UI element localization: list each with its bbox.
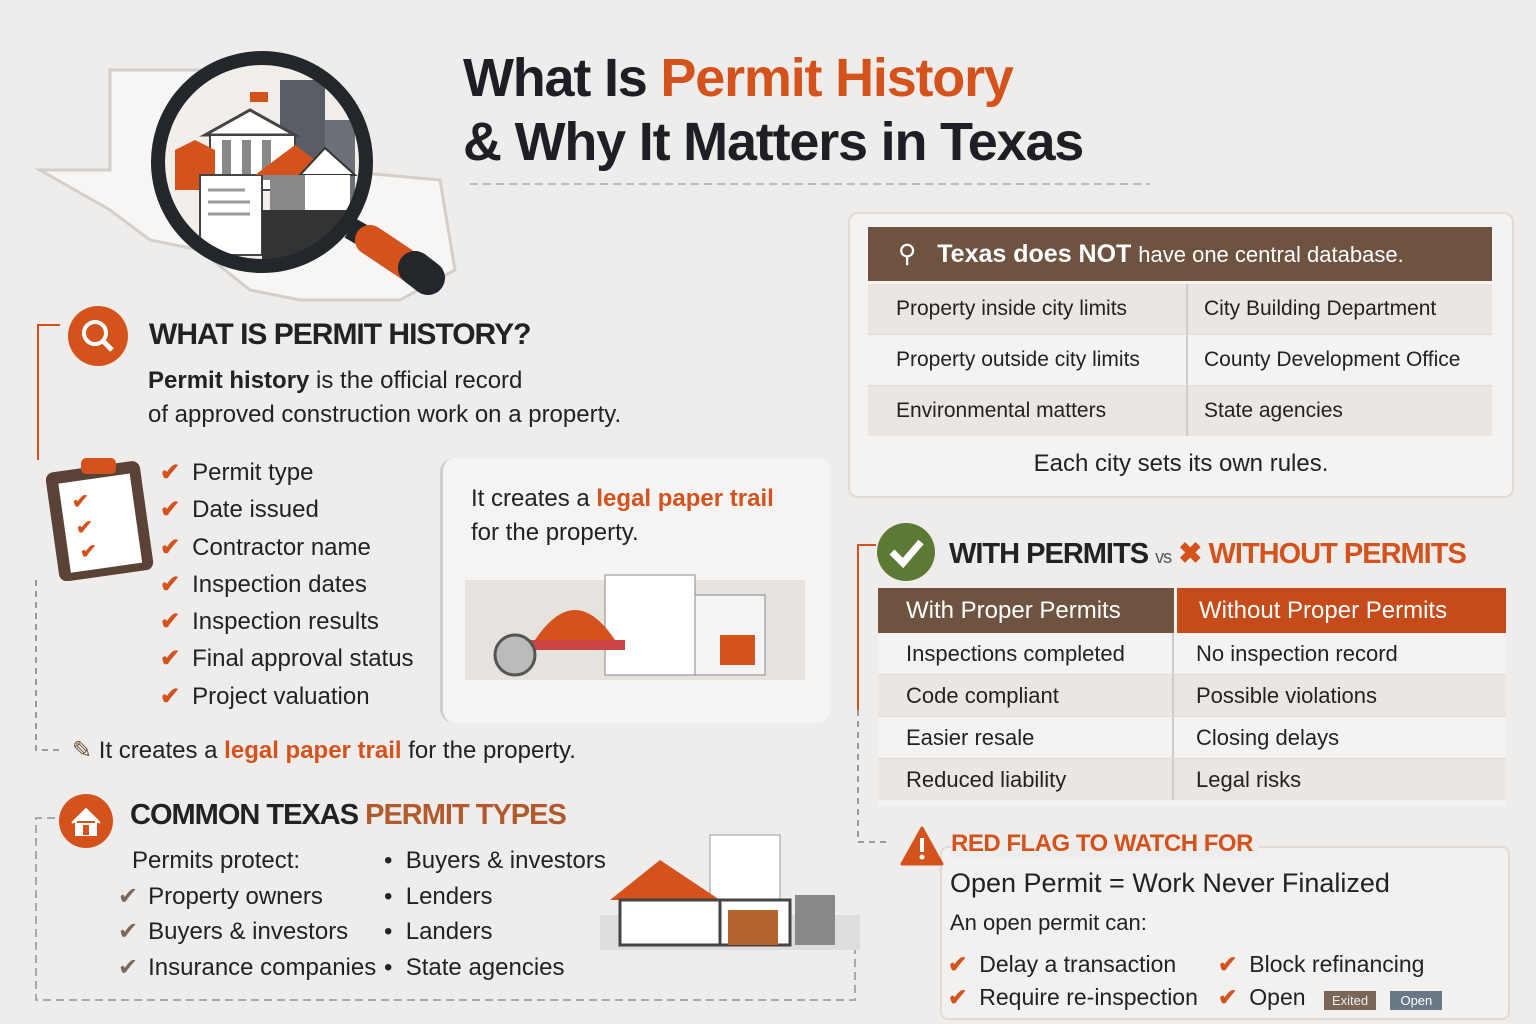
- comparison table: Code compliant: [906, 683, 1059, 708]
- checklist: ✔ Final approval status: [160, 645, 414, 672]
- icon: magnifier over Texas: [34, 51, 456, 302]
- paper trail line: ✎ It creates a legal paper trail for the property.: [72, 737, 576, 764]
- text: • Landers: [384, 918, 492, 945]
- panel: paper trail card: for the property.: [471, 519, 639, 546]
- panel: red flag: An open permit can:: [950, 910, 1147, 935]
- comparison table: Inspections completed: [906, 641, 1125, 666]
- checklist: ✔ Contractor name: [160, 534, 371, 561]
- heading: common texas permit types: COMMON TEXAS PERMIT TYPES: [130, 799, 566, 831]
- comparison table: Closing delays: [1196, 725, 1339, 750]
- panel: red flag: ✔ Delay a transaction: [948, 951, 1176, 977]
- title: & Why It Matters in Texas: [463, 112, 1083, 172]
- comparison table: No inspection record: [1196, 641, 1398, 666]
- icon: clipboard: ✔: [80, 541, 97, 563]
- comparison table: Easier resale: [906, 725, 1034, 750]
- comparison table: Legal risks: [1196, 767, 1301, 792]
- permit protect list: ✔ Insurance companies: [118, 954, 376, 980]
- permit protect list: [118, 847, 376, 980]
- permit protect list: ✔ Property owners: [118, 882, 323, 910]
- checklist: ✔ Inspection results: [160, 608, 379, 635]
- heading: what is permit history: WHAT IS PERMIT HISTORY?: [149, 318, 530, 351]
- illustration: house: [600, 834, 860, 950]
- checklist: ✔ Project valuation: [160, 683, 370, 710]
- title: What Is Permit History: [463, 48, 1013, 108]
- heading: with vs without: [877, 523, 1466, 581]
- text: • Buyers & investors: [384, 847, 606, 874]
- note: Each city sets its own rules.: [1034, 450, 1328, 477]
- panel: red flag: RED FLAG TO WATCH FOR: [951, 830, 1253, 857]
- database table: Property inside city limits: [896, 297, 1127, 320]
- definition text: [148, 367, 621, 428]
- icon: clipboard: ✔: [76, 517, 93, 539]
- checklist: ✔ Permit type: [160, 459, 313, 486]
- heading: with vs without: WITH PERMITS vs ✖ WITHOUT PERMITS: [949, 538, 1466, 570]
- title: [463, 48, 1083, 172]
- heading: common texas permit types: [59, 794, 566, 848]
- database table: City Building Department: [1204, 297, 1436, 320]
- checklist: ✔ Inspection dates: [160, 571, 367, 598]
- comparison table: Reduced liability: [906, 767, 1066, 792]
- text: • State agencies: [384, 954, 565, 980]
- panel: paper trail card: [440, 458, 831, 723]
- comparison table: Possible violations: [1196, 683, 1377, 708]
- database table: [868, 284, 1492, 436]
- database table: State agencies: [1204, 399, 1343, 422]
- comparison table: Without Proper Permits: [1199, 597, 1447, 624]
- definition text: Permit history is the official record: [148, 367, 522, 394]
- permit protect list: ✔ Buyers & investors: [118, 918, 348, 945]
- database table: Property outside city limits: [896, 348, 1140, 371]
- definition text: of approved construction work on a property.: [148, 401, 621, 428]
- panel: red flag: ✔ Require re-inspection: [948, 984, 1198, 1010]
- database header: [868, 227, 1492, 281]
- database header: ⚲ Texas does NOT have one central database.: [898, 240, 1404, 268]
- database table: Environmental matters: [896, 399, 1106, 422]
- permit protect list: Permits protect:: [132, 847, 300, 874]
- panel: red flag: Open Permit = Work Never Finalized: [950, 868, 1390, 898]
- panel: red flag: [900, 826, 1510, 1020]
- checklist: [160, 459, 414, 710]
- illustration: documents and hard hat: [465, 574, 805, 680]
- text: • Lenders: [384, 882, 492, 910]
- checklist: ✔ Date issued: [160, 496, 319, 523]
- panel: red flag: ✔ Block refinancing: [1218, 951, 1424, 977]
- comparison table: [878, 588, 1506, 806]
- panel: paper trail card: It creates a legal paper trail: [471, 485, 774, 512]
- panel: Texas database: [848, 212, 1514, 498]
- icon: warning: [900, 826, 944, 866]
- panel: red flag: ✔ Open Exited Open: [1218, 984, 1432, 1010]
- heading: what is permit history: [68, 306, 530, 366]
- comparison table: With Proper Permits: [906, 597, 1121, 624]
- database table: County Development Office: [1204, 348, 1460, 371]
- icon: clipboard: ✔: [72, 491, 89, 513]
- icon: clipboard: [46, 458, 154, 581]
